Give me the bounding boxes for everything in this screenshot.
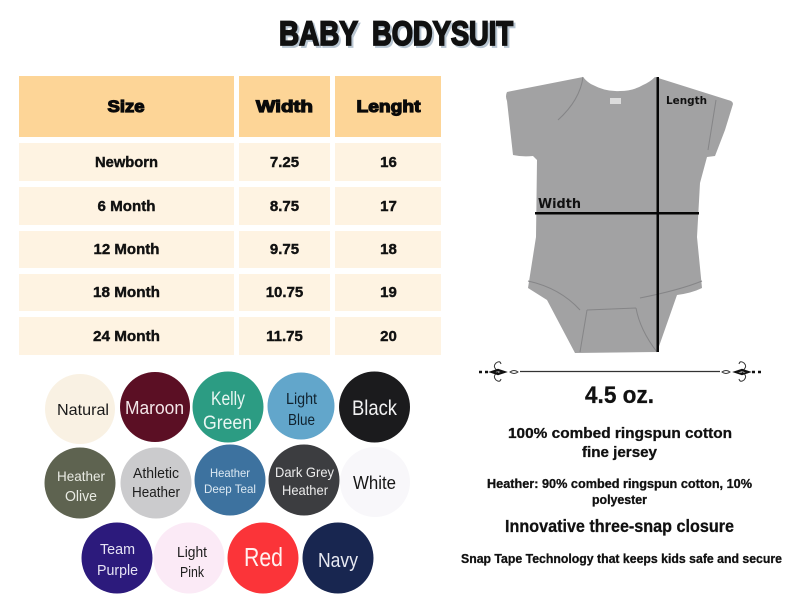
row: Newborn: Newborn (95, 154, 158, 171)
row: 6 Month: 17 (380, 198, 397, 215)
closure feature: Innovative three-snap closure (505, 516, 734, 536)
swatch: Light Blue: Light (286, 391, 317, 408)
row: Newborn: 16 (380, 154, 397, 171)
heather description: Heather: 90% combed ringspun cotton, 10% (487, 476, 752, 491)
row: 12 Month (19, 231, 441, 268)
title (279, 15, 515, 55)
swatch: Athletic Heather (120, 448, 192, 518)
swatch: Light Blue: Blue (288, 412, 315, 429)
swatch: Dark Grey Heather (268, 444, 340, 516)
icon: grey bodysuit (506, 77, 733, 353)
row: 6 Month: 6 Month (98, 198, 156, 215)
swatch: Kelly Green: Kelly (211, 389, 245, 410)
fabric description: fine jersey (582, 444, 658, 461)
title: BODYSUIT (374, 17, 515, 55)
swatch: Maroon (120, 372, 190, 442)
swatch: Heather Deep Teal (194, 444, 266, 516)
swatch: Light Blue (268, 372, 334, 440)
colour swatches (44, 372, 410, 594)
swatch: Kelly Green: Green (203, 413, 252, 434)
swatch: Heather Olive: Heather (57, 468, 105, 484)
title: BODYSUIT (372, 15, 513, 53)
swatch: Maroon: Maroon (125, 398, 184, 418)
swatch: Black (339, 372, 410, 442)
ornamental divider (479, 362, 761, 381)
swatch: Red: Red (244, 542, 283, 572)
size table (19, 76, 441, 355)
fabric description: 100% combed ringspun cotton (508, 425, 732, 442)
swatch: Natural (45, 374, 115, 444)
table header row: Size (108, 97, 144, 116)
swatch: Heather Olive: Olive (65, 488, 97, 505)
title: BABY (279, 15, 358, 53)
width line (535, 212, 699, 214)
row: 6 Month (19, 187, 441, 225)
bodysuit measurement diagram (506, 77, 733, 353)
swatch: Kelly Green (192, 372, 264, 442)
row: 18 Month: 19 (380, 284, 397, 301)
table header row (19, 76, 441, 137)
title: BABY (281, 17, 360, 55)
swatch: Navy (302, 522, 374, 594)
row: 24 Month (19, 317, 441, 355)
label: Length: Length (666, 94, 707, 107)
row: 18 Month: 10.75 (266, 284, 303, 301)
swatch: Athletic Heather: Heather (132, 484, 180, 501)
row: 12 Month: 9.75 (270, 241, 299, 258)
row: 24 Month: 20 (380, 328, 397, 345)
swatch: Heather Olive (44, 448, 116, 518)
swatch: Team Purple: Purple (97, 562, 138, 579)
snap tape note: Snap Tape Technology that keeps kids safe and secure (461, 551, 782, 566)
swatch: White (340, 447, 410, 517)
heather description (487, 476, 752, 507)
swatch: Athletic Heather: Athletic (133, 465, 179, 482)
heather description: polyester (592, 492, 647, 507)
swatch: Light Pink: Light (177, 544, 208, 561)
swatch: Team Purple (82, 522, 152, 594)
row: 18 Month: 18 Month (93, 284, 160, 301)
swatch: Heather Deep Teal: Heather (210, 466, 250, 480)
swatch: Dark Grey Heather: Dark Grey (275, 464, 334, 480)
swatch: Natural: Natural (57, 402, 109, 419)
swatch: Team Purple: Team (100, 541, 135, 558)
swatch: White: White (353, 473, 396, 493)
row: 12 Month: 18 (380, 241, 397, 258)
swatch: Light Pink (154, 522, 224, 594)
row: Newborn (19, 143, 441, 181)
swatch: Navy: Navy (318, 550, 358, 572)
row: 12 Month: 12 Month (94, 241, 160, 258)
fabric weight heading: 4.5 oz. (585, 382, 654, 409)
row: 6 Month: 8.75 (270, 198, 299, 215)
swatch: Black: Black (352, 397, 397, 420)
row: 18 Month (19, 274, 441, 311)
length line (656, 77, 659, 352)
table header row: Width (256, 97, 313, 116)
label: Width: Width (538, 197, 581, 212)
swatch: Red (228, 522, 298, 594)
swatch: Dark Grey Heather: Heather (282, 482, 328, 498)
table header row: Lenght (356, 97, 421, 116)
row: Newborn: 7.25 (270, 154, 299, 171)
row: 24 Month: 24 Month (93, 328, 160, 345)
row: 24 Month: 11.75 (266, 328, 303, 345)
swatch: Light Pink: Pink (180, 564, 204, 581)
fabric description (508, 425, 732, 461)
swatch: Heather Deep Teal: Deep Teal (204, 482, 256, 496)
